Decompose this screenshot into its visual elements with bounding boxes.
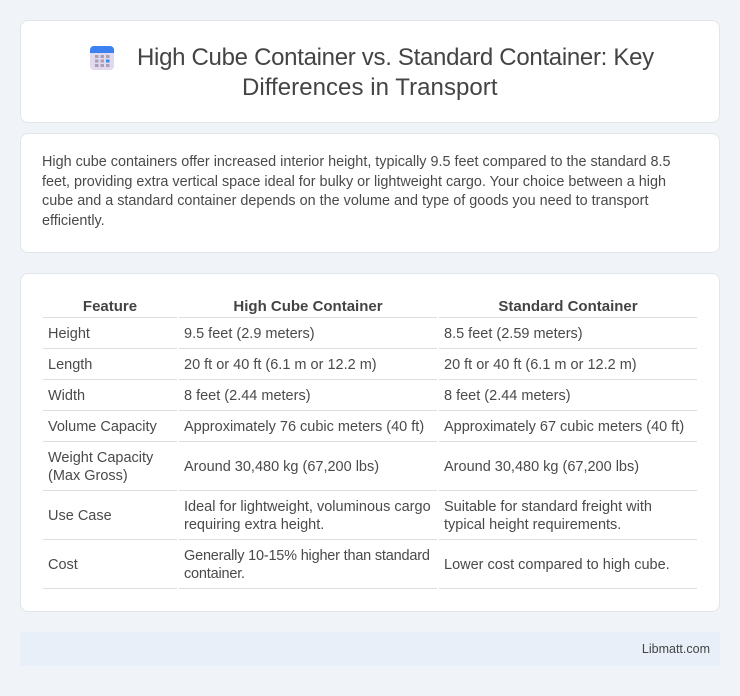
row: width: Width: [48, 388, 85, 404]
row: cost: [48, 548, 670, 582]
row: height: 9.5 feet (2.9 meters): [184, 326, 315, 342]
footer bar: [20, 632, 720, 666]
row: weight capacity: (Max Gross): [48, 468, 128, 484]
comparison table panel: [20, 273, 720, 612]
title: [137, 44, 654, 101]
row: use case: requiring extra height.: [184, 517, 324, 533]
column headers: High Cube Container: [233, 298, 383, 315]
header panel: [20, 20, 720, 123]
row: cost: Generally 10-15% higher than standard: [184, 548, 430, 564]
row: volume capacity: Approximately 76 cubic meters (40 ft): [184, 419, 424, 435]
intro paragraph: [42, 154, 670, 229]
row: use case: Suitable for standard freight with: [444, 499, 652, 515]
row: weight capacity: Around 30,480 kg (67,200 lbs): [444, 459, 639, 475]
row: volume capacity: Volume Capacity: [48, 419, 157, 435]
row: weight capacity: Weight Capacity: [48, 450, 153, 466]
row: use case: Ideal for lightweight, voluminous cargo: [184, 499, 431, 515]
intro text panel: [20, 133, 720, 253]
icon: calendar: [90, 46, 114, 70]
row: weight capacity: Around 30,480 kg (67,200 lbs): [184, 459, 379, 475]
row: height: 8.5 feet (2.59 meters): [444, 326, 583, 342]
intro paragraph: efficiently.: [42, 213, 105, 229]
intro paragraph: High cube containers offer increased interior height, typically 9.5 feet compared to the standard 8.5: [42, 154, 670, 170]
footer brand: Libmatt.com: [642, 642, 710, 656]
row: length: [48, 357, 637, 373]
column headers: Feature: [83, 298, 137, 315]
row: width: 8 feet (2.44 meters): [184, 388, 311, 404]
intro paragraph: feet, providing extra vertical space ideal for bulky or lightweight cargo. Your choice between a high: [42, 174, 666, 190]
row: width: [48, 388, 571, 404]
row: weight capacity: [48, 450, 639, 484]
column headers: [83, 298, 638, 315]
row: height: Height: [48, 326, 90, 342]
intro paragraph: cube and a standard container depends on the volume and type of goods you need to transport: [42, 193, 648, 209]
row: use case: Use Case: [48, 508, 112, 524]
row: volume capacity: [48, 419, 684, 435]
row: volume capacity: Approximately 67 cubic meters (40 ft): [444, 419, 684, 435]
title: High Cube Container vs. Standard Container: Key: [137, 44, 654, 71]
row: length: 20 ft or 40 ft (6.1 m or 12.2 m): [444, 357, 637, 373]
row: use case: [48, 499, 652, 533]
row: cost: container.: [184, 566, 245, 582]
row: width: 8 feet (2.44 meters): [444, 388, 571, 404]
column headers: Standard Container: [498, 298, 638, 315]
row: length: 20 ft or 40 ft (6.1 m or 12.2 m): [184, 357, 377, 373]
title: Differences in Transport: [242, 74, 498, 101]
row: cost: Cost: [48, 557, 78, 573]
row: cost: Lower cost compared to high cube.: [444, 557, 670, 573]
row: use case: typical height requirements.: [444, 517, 621, 533]
row: height: [48, 326, 583, 342]
row: length: Length: [48, 357, 92, 373]
